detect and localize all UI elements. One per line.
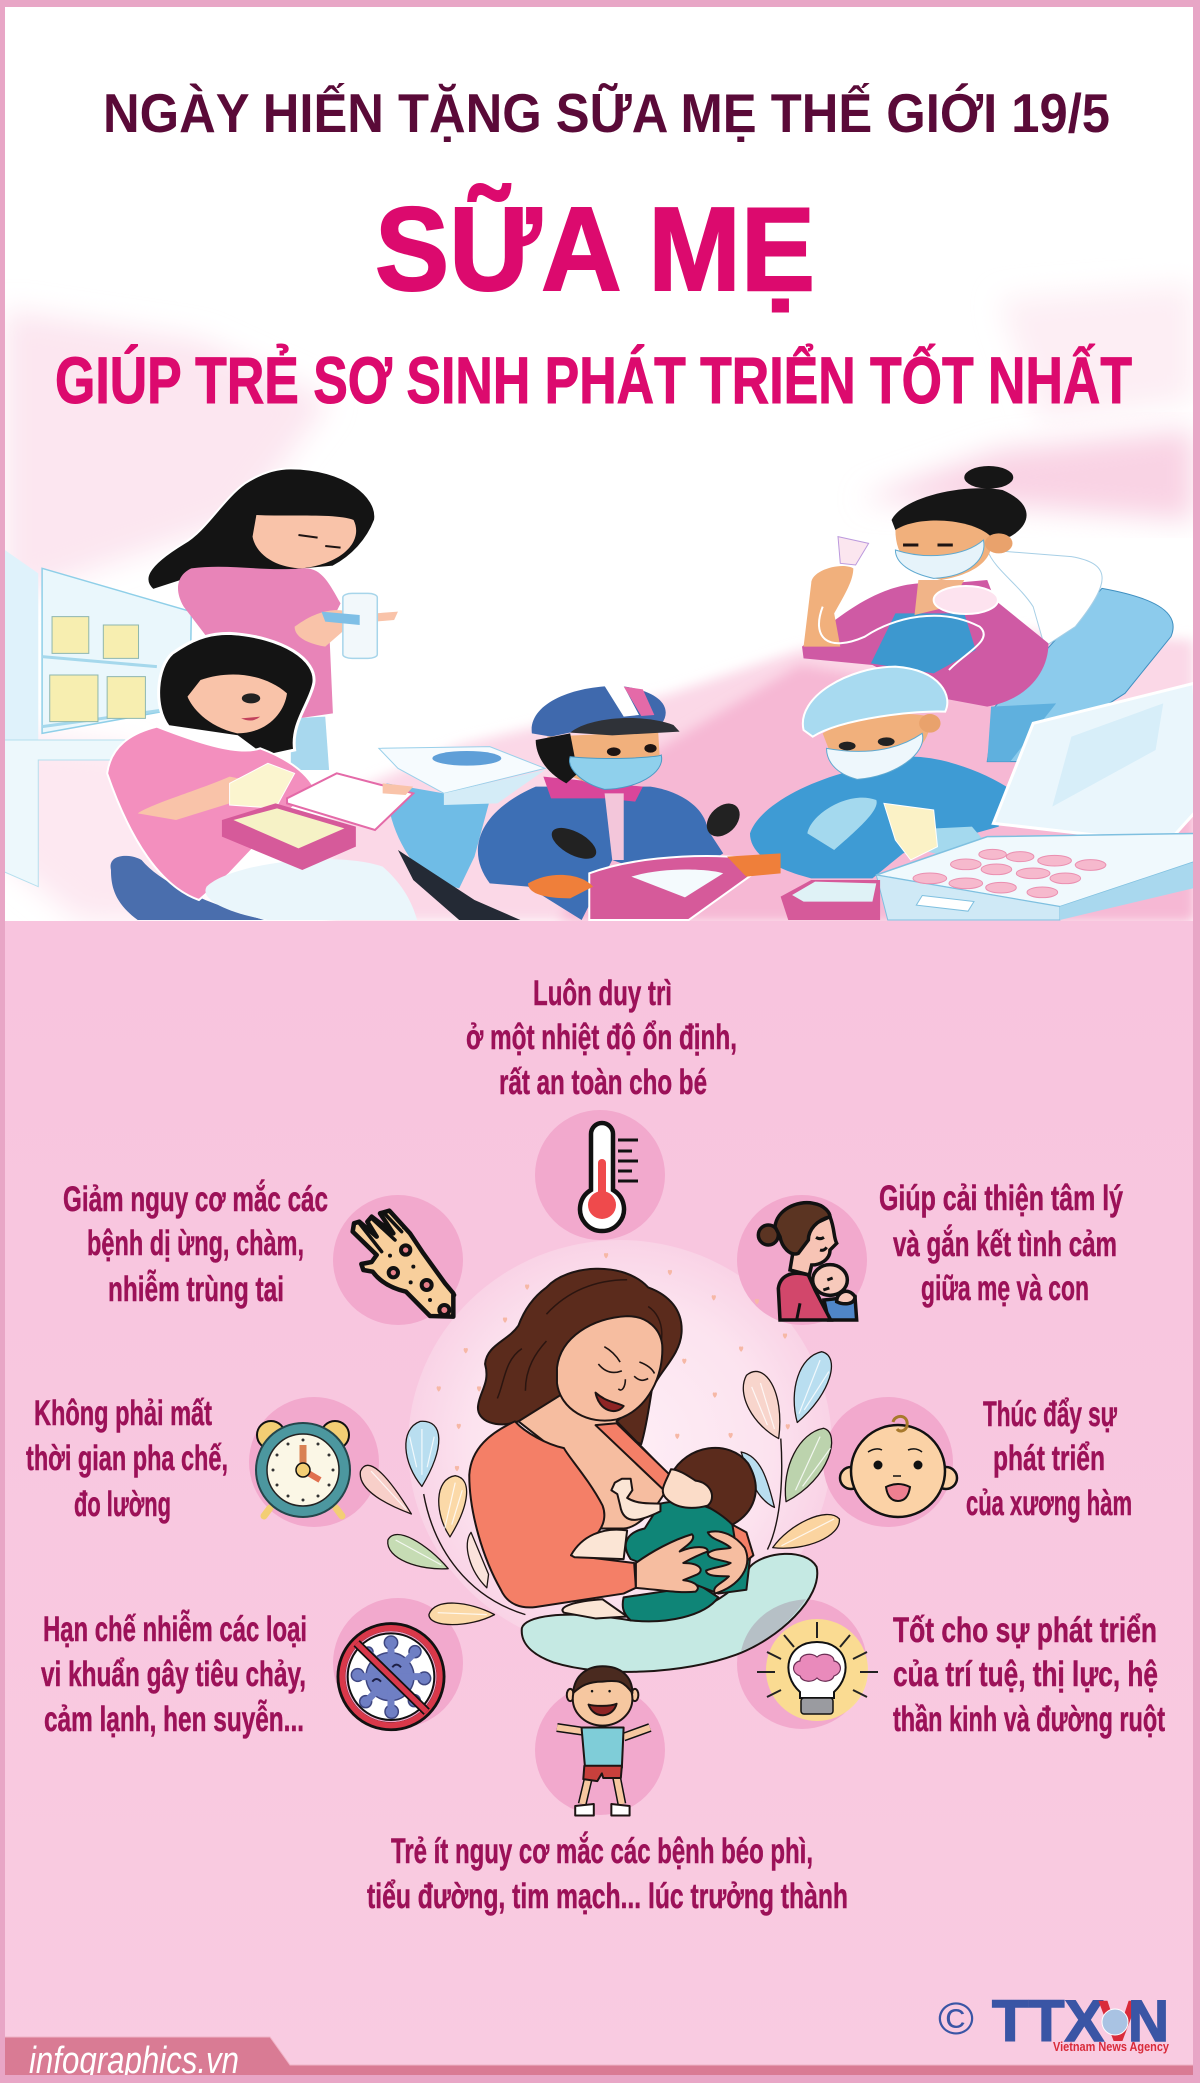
benefit: mother-child bond: giữa mẹ và con bbox=[921, 1269, 1089, 1308]
benefit: allergy reduction: nhiễm trùng tai bbox=[108, 1269, 284, 1309]
baby bbox=[562, 1448, 756, 1621]
mother hair bbox=[478, 1269, 682, 1444]
icon: brain light bulb bbox=[757, 1619, 878, 1721]
title line: event name: NGÀY HIẾN TẶNG SỮA MẸ THẾ GIỚI 19/5 bbox=[103, 82, 1110, 144]
coral cardigan bbox=[469, 1421, 670, 1607]
central halo behind mother bbox=[408, 1240, 832, 1652]
benefit: saves preparation time: đo lường bbox=[74, 1485, 171, 1524]
seated mother with lunch box bbox=[107, 633, 417, 920]
benefit: limits infections: vi khuẩn gây tiêu chảy, bbox=[41, 1655, 306, 1694]
icon discs bbox=[249, 1110, 953, 1815]
icon: rash on hand bbox=[353, 1211, 456, 1317]
mother hands bbox=[636, 1531, 747, 1594]
benefit: jaw development: Thúc đẩy sự bbox=[983, 1395, 1117, 1434]
icon: no virus bbox=[341, 1627, 441, 1727]
benefit: limits infections: cảm lạnh, hen suyễn... bbox=[44, 1699, 304, 1739]
benefit: limits infections: Hạn chế nhiễm các loại bbox=[43, 1609, 307, 1649]
chest and neck bbox=[518, 1391, 669, 1529]
benefit: allergy reduction: bệnh dị ừng, chàm, bbox=[87, 1224, 304, 1263]
hero illustration: milk donation scene bbox=[0, 285, 1200, 921]
benefit: saves preparation time: thời gian pha chế, bbox=[26, 1439, 228, 1478]
title line: main heading: SỮA MẸ bbox=[375, 183, 815, 316]
logo: TTXVN bbox=[938, 1989, 1170, 2054]
hair strands bbox=[497, 1280, 662, 1398]
icon: thermometer bbox=[580, 1123, 638, 1231]
logo: TTXVN: V bbox=[1098, 1989, 1138, 2054]
fridge with milk bags bbox=[0, 547, 191, 887]
benefit: temperature: rất an toàn cho bé bbox=[499, 1063, 707, 1102]
source label: infographics.vn bbox=[29, 2040, 239, 2082]
delivery rider on scooter bbox=[379, 686, 781, 920]
icon: mother hugging baby bbox=[758, 1203, 857, 1320]
decorative leaves bbox=[360, 1352, 839, 1625]
logo: TTXVN: © bbox=[938, 1993, 974, 2044]
benefit: allergy reduction: Giảm nguy cơ mắc các bbox=[63, 1179, 328, 1219]
benefit: jaw development: phát triển bbox=[993, 1439, 1105, 1478]
logo: TTXVN: N bbox=[1128, 1989, 1169, 2054]
benefit: saves preparation time: Không phải mất bbox=[34, 1394, 212, 1433]
benefit: brain, vision, nerves, gut bbox=[893, 1611, 1165, 1739]
woman using breast pump bbox=[802, 466, 1173, 762]
background watercolour smudges bbox=[5, 285, 1194, 921]
benefit: lower adult disease risk bbox=[367, 1831, 848, 1916]
logo: TTXVN: Vietnam News Agency bbox=[1053, 2039, 1170, 2054]
central illustration: breastfeeding mother bbox=[360, 1253, 839, 1672]
benefit: temperature: Luôn duy trì bbox=[533, 974, 672, 1013]
benefit: jaw development bbox=[966, 1395, 1132, 1523]
pink milk case near scooter bbox=[781, 880, 880, 920]
nursing pillow bbox=[522, 1554, 817, 1672]
benefit: temperature bbox=[466, 974, 737, 1102]
benefit: mother-child bond bbox=[879, 1179, 1123, 1308]
pillow shade where the disc overlaps bbox=[741, 1599, 806, 1651]
icon: happy boy bbox=[557, 1666, 650, 1816]
logo: TTXVN: TTX bbox=[992, 1989, 1104, 2054]
standing mother with pump bbox=[147, 468, 398, 770]
icon: alarm clock bbox=[256, 1421, 350, 1517]
cool box with milk containers bbox=[876, 683, 1200, 920]
mother face bbox=[557, 1316, 662, 1421]
benefit: saves preparation time bbox=[26, 1394, 228, 1524]
benefit: allergy reduction bbox=[63, 1179, 328, 1309]
benefit: lower adult disease risk: tiểu đường, tim mạch... lúc trưởng thành bbox=[367, 1877, 848, 1916]
footer band with source tab bbox=[5, 2036, 1193, 2075]
benefit: limits infections bbox=[41, 1609, 307, 1739]
icon: baby face bbox=[840, 1416, 957, 1517]
benefit: temperature: ở một nhiệt độ ổn định, bbox=[466, 1018, 737, 1057]
doctor handling milk bbox=[750, 667, 1006, 878]
floating hearts bbox=[437, 1253, 790, 1471]
benefit: lower adult disease risk: Trẻ ít nguy cơ mắc các bệnh béo phì, bbox=[391, 1831, 813, 1871]
title bbox=[55, 82, 1132, 417]
